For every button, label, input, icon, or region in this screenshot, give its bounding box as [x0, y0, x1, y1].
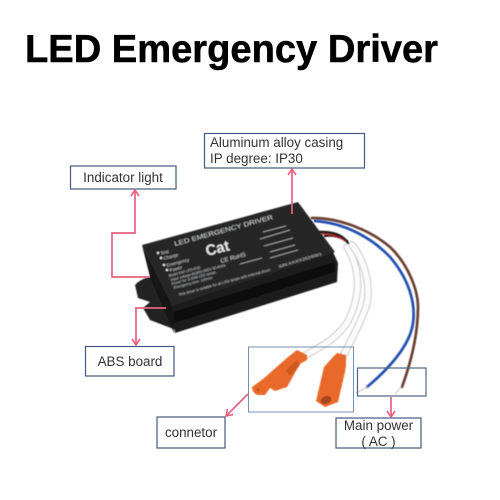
wire: white to right connector [342, 245, 368, 358]
callout: abs board [86, 346, 174, 376]
product labels: Emergency time: 120min [173, 276, 213, 290]
driver unit [135, 202, 338, 333]
product labels [160, 214, 322, 297]
wire: stripped ends [356, 387, 401, 394]
driver side groove [173, 262, 335, 323]
logo: Cat [204, 238, 231, 260]
callout: casing [204, 134, 364, 168]
callout: casing: Aluminum alloy casing [210, 135, 343, 150]
product name: LED EMERGENCY DRIVER [174, 214, 274, 248]
serial number: S/N:XXXX2024001 [278, 252, 322, 269]
arrow: abs board [136, 308, 166, 345]
wire: brown neutral [312, 218, 418, 387]
callout: connector frame [248, 347, 354, 412]
callout: main power: ( AC ) [361, 434, 396, 449]
callout: wire end frame [358, 368, 426, 396]
arrow: casing [291, 169, 293, 214]
arrow: indicator light [112, 190, 150, 277]
arrow: connector [226, 394, 248, 416]
arrows [112, 169, 391, 417]
arrow: main power [390, 397, 392, 417]
title: LED Emergency Driver [25, 28, 438, 71]
callout: main power [336, 418, 421, 449]
product labels: Power for 3-30W LED lamps [171, 270, 216, 286]
driver left side [142, 245, 174, 333]
callout: abs board: ABS board [98, 354, 162, 369]
wire: red and black stubs [320, 232, 348, 243]
driver top face [142, 202, 335, 306]
product labels: Charge [163, 252, 179, 261]
callout: connector label: connetor [165, 425, 218, 440]
callout: connector label [157, 417, 225, 448]
callout: indicator light: Indicator light [83, 170, 163, 185]
indicator dots [157, 252, 168, 271]
abs mounting clip [135, 277, 176, 330]
certification marks: CE RoHS [220, 252, 247, 265]
specification lines: Model:FAT-LED-P30 [168, 266, 201, 278]
wire: blue live [315, 221, 414, 387]
wires [304, 218, 418, 394]
product labels: Emergency [166, 257, 190, 268]
wire: white to left connector [304, 247, 358, 356]
product labels: Power [169, 265, 183, 273]
orange connector: right [316, 353, 346, 407]
callout: main power: Main power [344, 418, 414, 433]
callout: casing: IP degree: IP30 [210, 151, 303, 166]
wiring diagram lines [240, 226, 298, 264]
product labels: This driver is suitable for all LED lamps with external driver [178, 268, 272, 297]
indicator labels: Test [160, 249, 170, 256]
callout: indicator light [70, 166, 176, 189]
driver body side [172, 252, 338, 333]
orange connector: left [252, 350, 307, 395]
product labels: Input voltage:AC85V-265V 50-60Hz [170, 263, 226, 282]
